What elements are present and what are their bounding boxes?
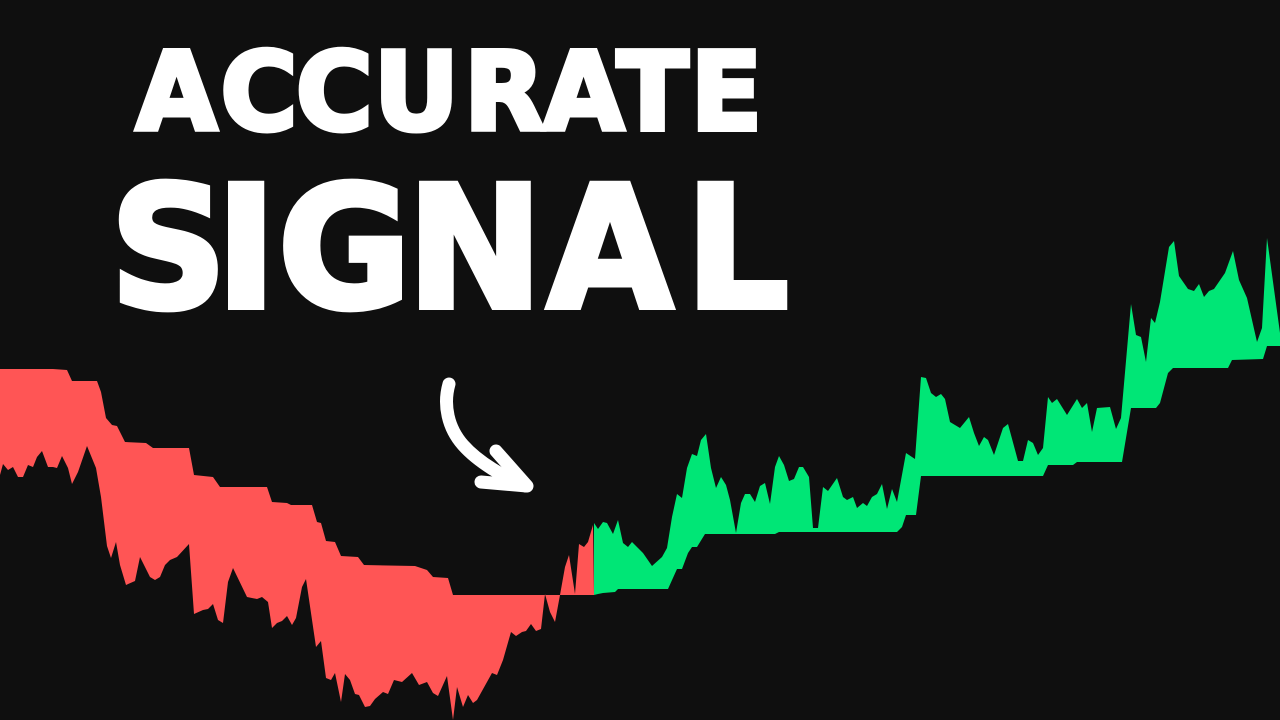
title	[110, 30, 789, 348]
arrow pointing to the signal flip	[447, 384, 527, 486]
bearish red band	[0, 369, 594, 720]
title line: SIGNAL: SIGNAL	[110, 151, 789, 348]
area chart: trailing signal band	[0, 238, 1280, 720]
bullish green band	[594, 238, 1280, 595]
title line: ACCURATE: ACCURATE	[136, 30, 762, 156]
